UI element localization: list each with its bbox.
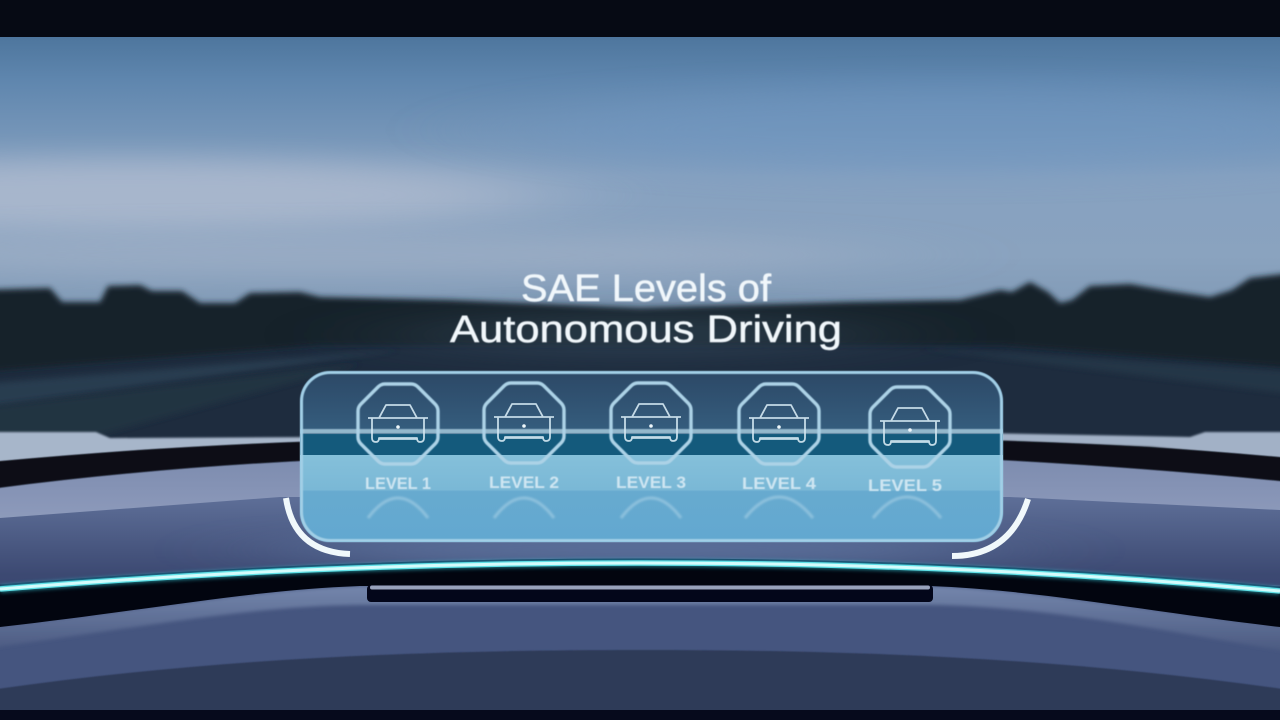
level 2 badge: LEVEL 2: [489, 473, 559, 492]
title: [450, 268, 842, 351]
level 4 badge: LEVEL 4: [742, 474, 817, 493]
title: Autonomous Driving: [450, 309, 842, 351]
glass HUD panel: [300, 371, 1003, 542]
level 1 badge: LEVEL 1: [365, 474, 431, 493]
level 2 badge: [484, 383, 564, 518]
level 5 badge: LEVEL 5: [868, 476, 942, 495]
right corner bracket: [952, 499, 1028, 556]
background: sky: [0, 0, 1280, 320]
left corner bracket: [286, 498, 350, 554]
dashboard upper surface: [0, 432, 1280, 595]
level 4 badge: [739, 384, 819, 518]
top black bar: [0, 0, 1280, 37]
recessed vent: [367, 585, 933, 602]
level 1 badge: [358, 384, 438, 518]
level 5 badge: [868, 387, 950, 518]
ambient cyan light line: [0, 560, 1280, 591]
level 3 badge: LEVEL 3: [616, 473, 686, 492]
lower dashboard: [0, 565, 1280, 720]
level 3 badge: [611, 383, 691, 518]
background: treeline and road: [0, 272, 1280, 440]
title: SAE Levels of: [521, 268, 771, 310]
